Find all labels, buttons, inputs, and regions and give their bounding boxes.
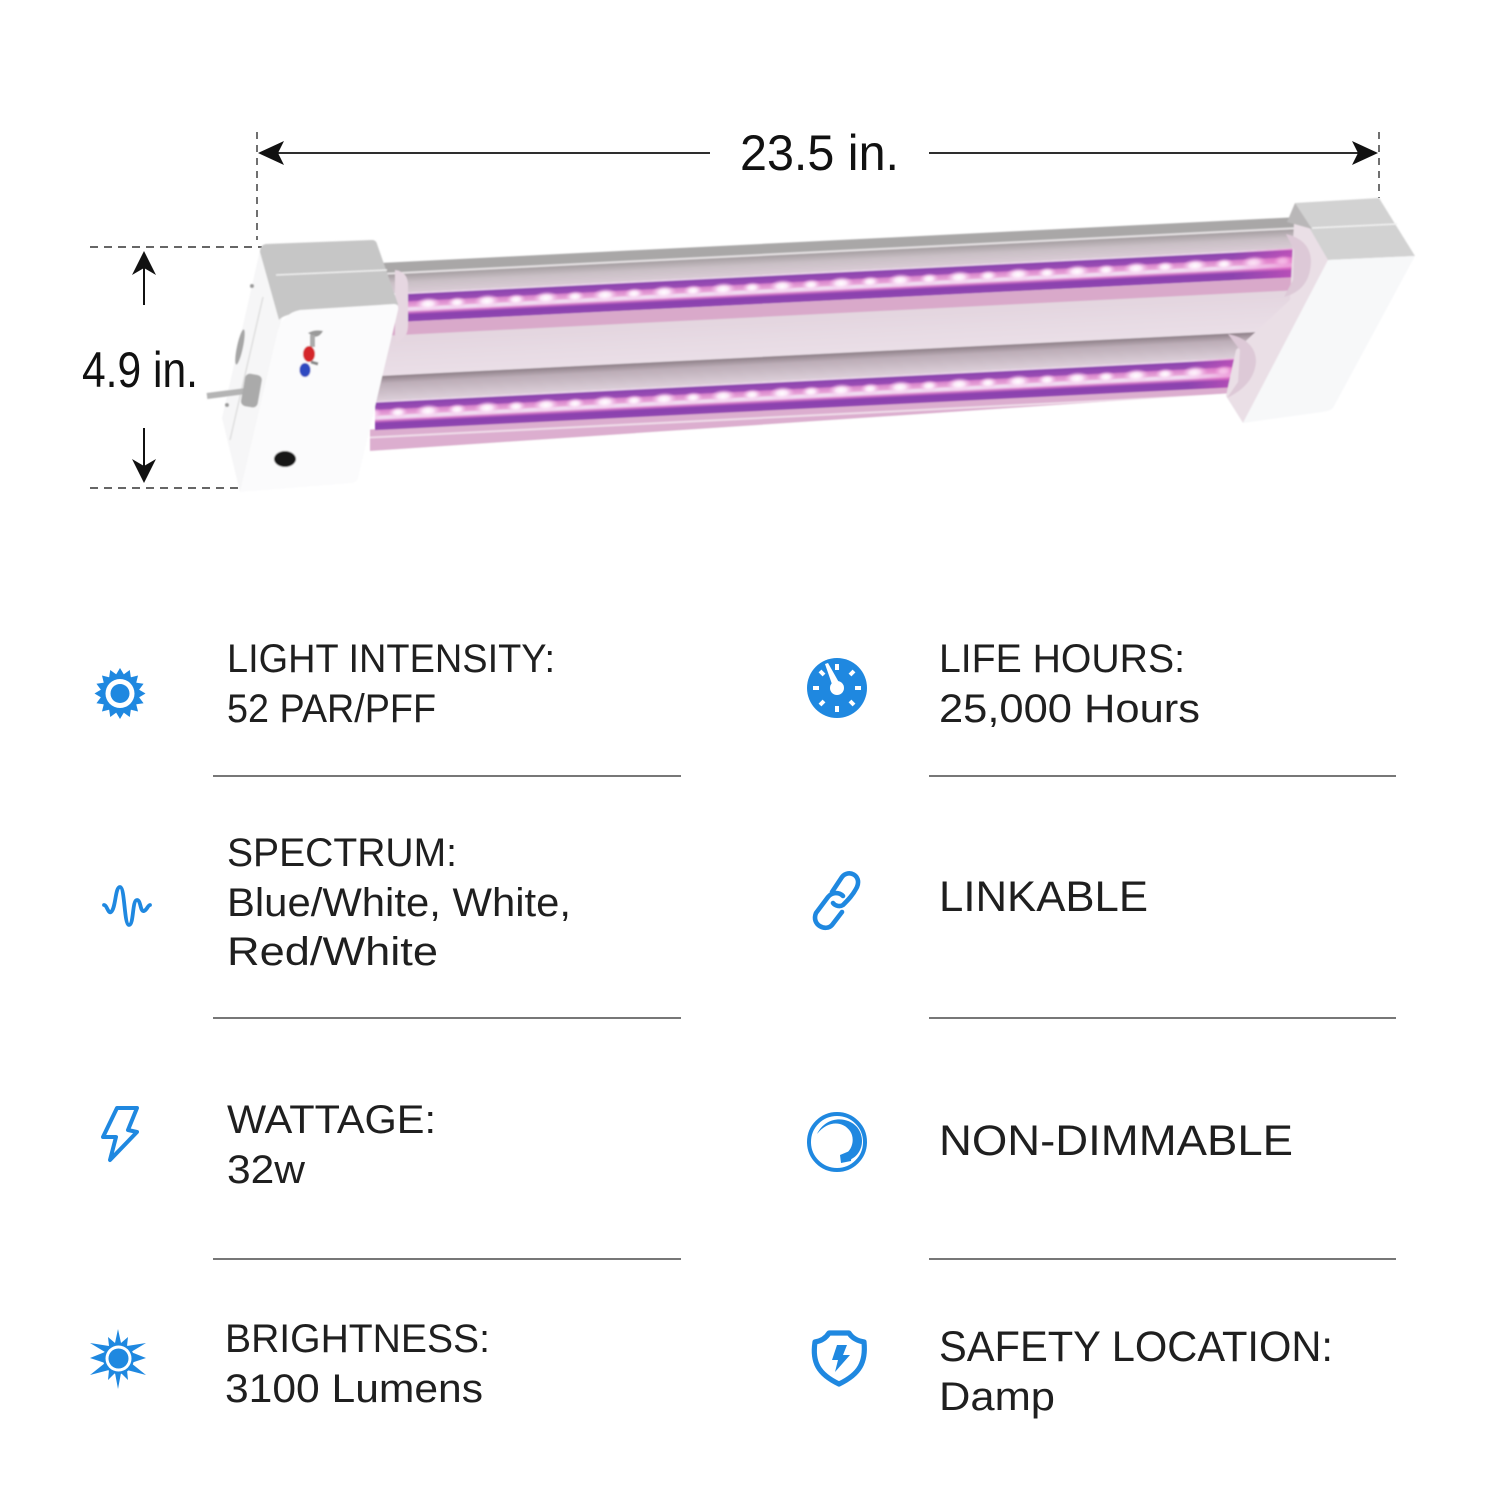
spec: wattage: 32w	[227, 1148, 305, 1192]
spec: spectrum: Red/White	[227, 930, 438, 974]
spec: non-dimmable	[809, 1114, 1293, 1170]
icon: lightning bolt outline	[103, 1108, 137, 1160]
icon: chain link	[815, 873, 858, 928]
spec: light intensity	[94, 637, 555, 731]
spec: spectrum: SPECTRUM:	[227, 831, 457, 875]
spec: linkable: LINKABLE	[939, 873, 1148, 921]
spec: safety location	[814, 1323, 1333, 1419]
spec: brightness: BRIGHTNESS:	[225, 1317, 490, 1361]
power cord	[207, 373, 263, 408]
spec: safety location: SAFETY LOCATION:	[939, 1323, 1333, 1371]
spec: linkable	[815, 873, 1148, 928]
icon: waveform	[104, 887, 150, 925]
divider lines	[213, 776, 1396, 1259]
spec: brightness	[90, 1317, 490, 1411]
width dimension: 23.5 in.: 23.5 in.	[740, 125, 899, 181]
right cap inner side	[1226, 204, 1330, 423]
wire connectors	[300, 330, 323, 377]
spec: wattage	[103, 1098, 436, 1192]
icon: dimmer ring	[809, 1114, 865, 1170]
left tube end	[395, 270, 408, 342]
icon: shield with bolt	[814, 1333, 864, 1384]
spec: life hours: 25,000 Hours	[939, 687, 1200, 731]
right tube end caps	[1284, 234, 1311, 297]
spec: brightness: 3100 Lumens	[225, 1367, 483, 1411]
icon: gear sun	[94, 668, 146, 719]
right end cap	[1243, 198, 1415, 423]
icon: starburst sun	[90, 1329, 146, 1389]
spec: non-dimmable: NON-DIMMABLE	[939, 1117, 1293, 1165]
left end cap	[222, 240, 398, 492]
spec: light intensity: LIGHT INTENSITY:	[227, 637, 555, 681]
height dimension: 4.9 in.: 4.9 in.	[82, 342, 198, 398]
spec: life hours	[807, 637, 1200, 731]
spec: light intensity: 52 PAR/PFF	[227, 687, 436, 731]
height dimension: 4.9 in.	[82, 247, 262, 488]
spec: safety location: Damp	[939, 1375, 1055, 1419]
icon: gauge dial	[807, 658, 867, 718]
spec: life hours: LIFE HOURS:	[939, 637, 1185, 681]
spec: spectrum: Blue/White, White,	[227, 881, 571, 925]
width dimension: 23.5 in.	[257, 125, 1379, 240]
spec: wattage: WATTAGE:	[227, 1098, 436, 1142]
product: LED grow light fixture	[207, 198, 1415, 492]
spec: spectrum	[104, 831, 571, 974]
twin LED tubes and back plate	[370, 216, 1310, 452]
